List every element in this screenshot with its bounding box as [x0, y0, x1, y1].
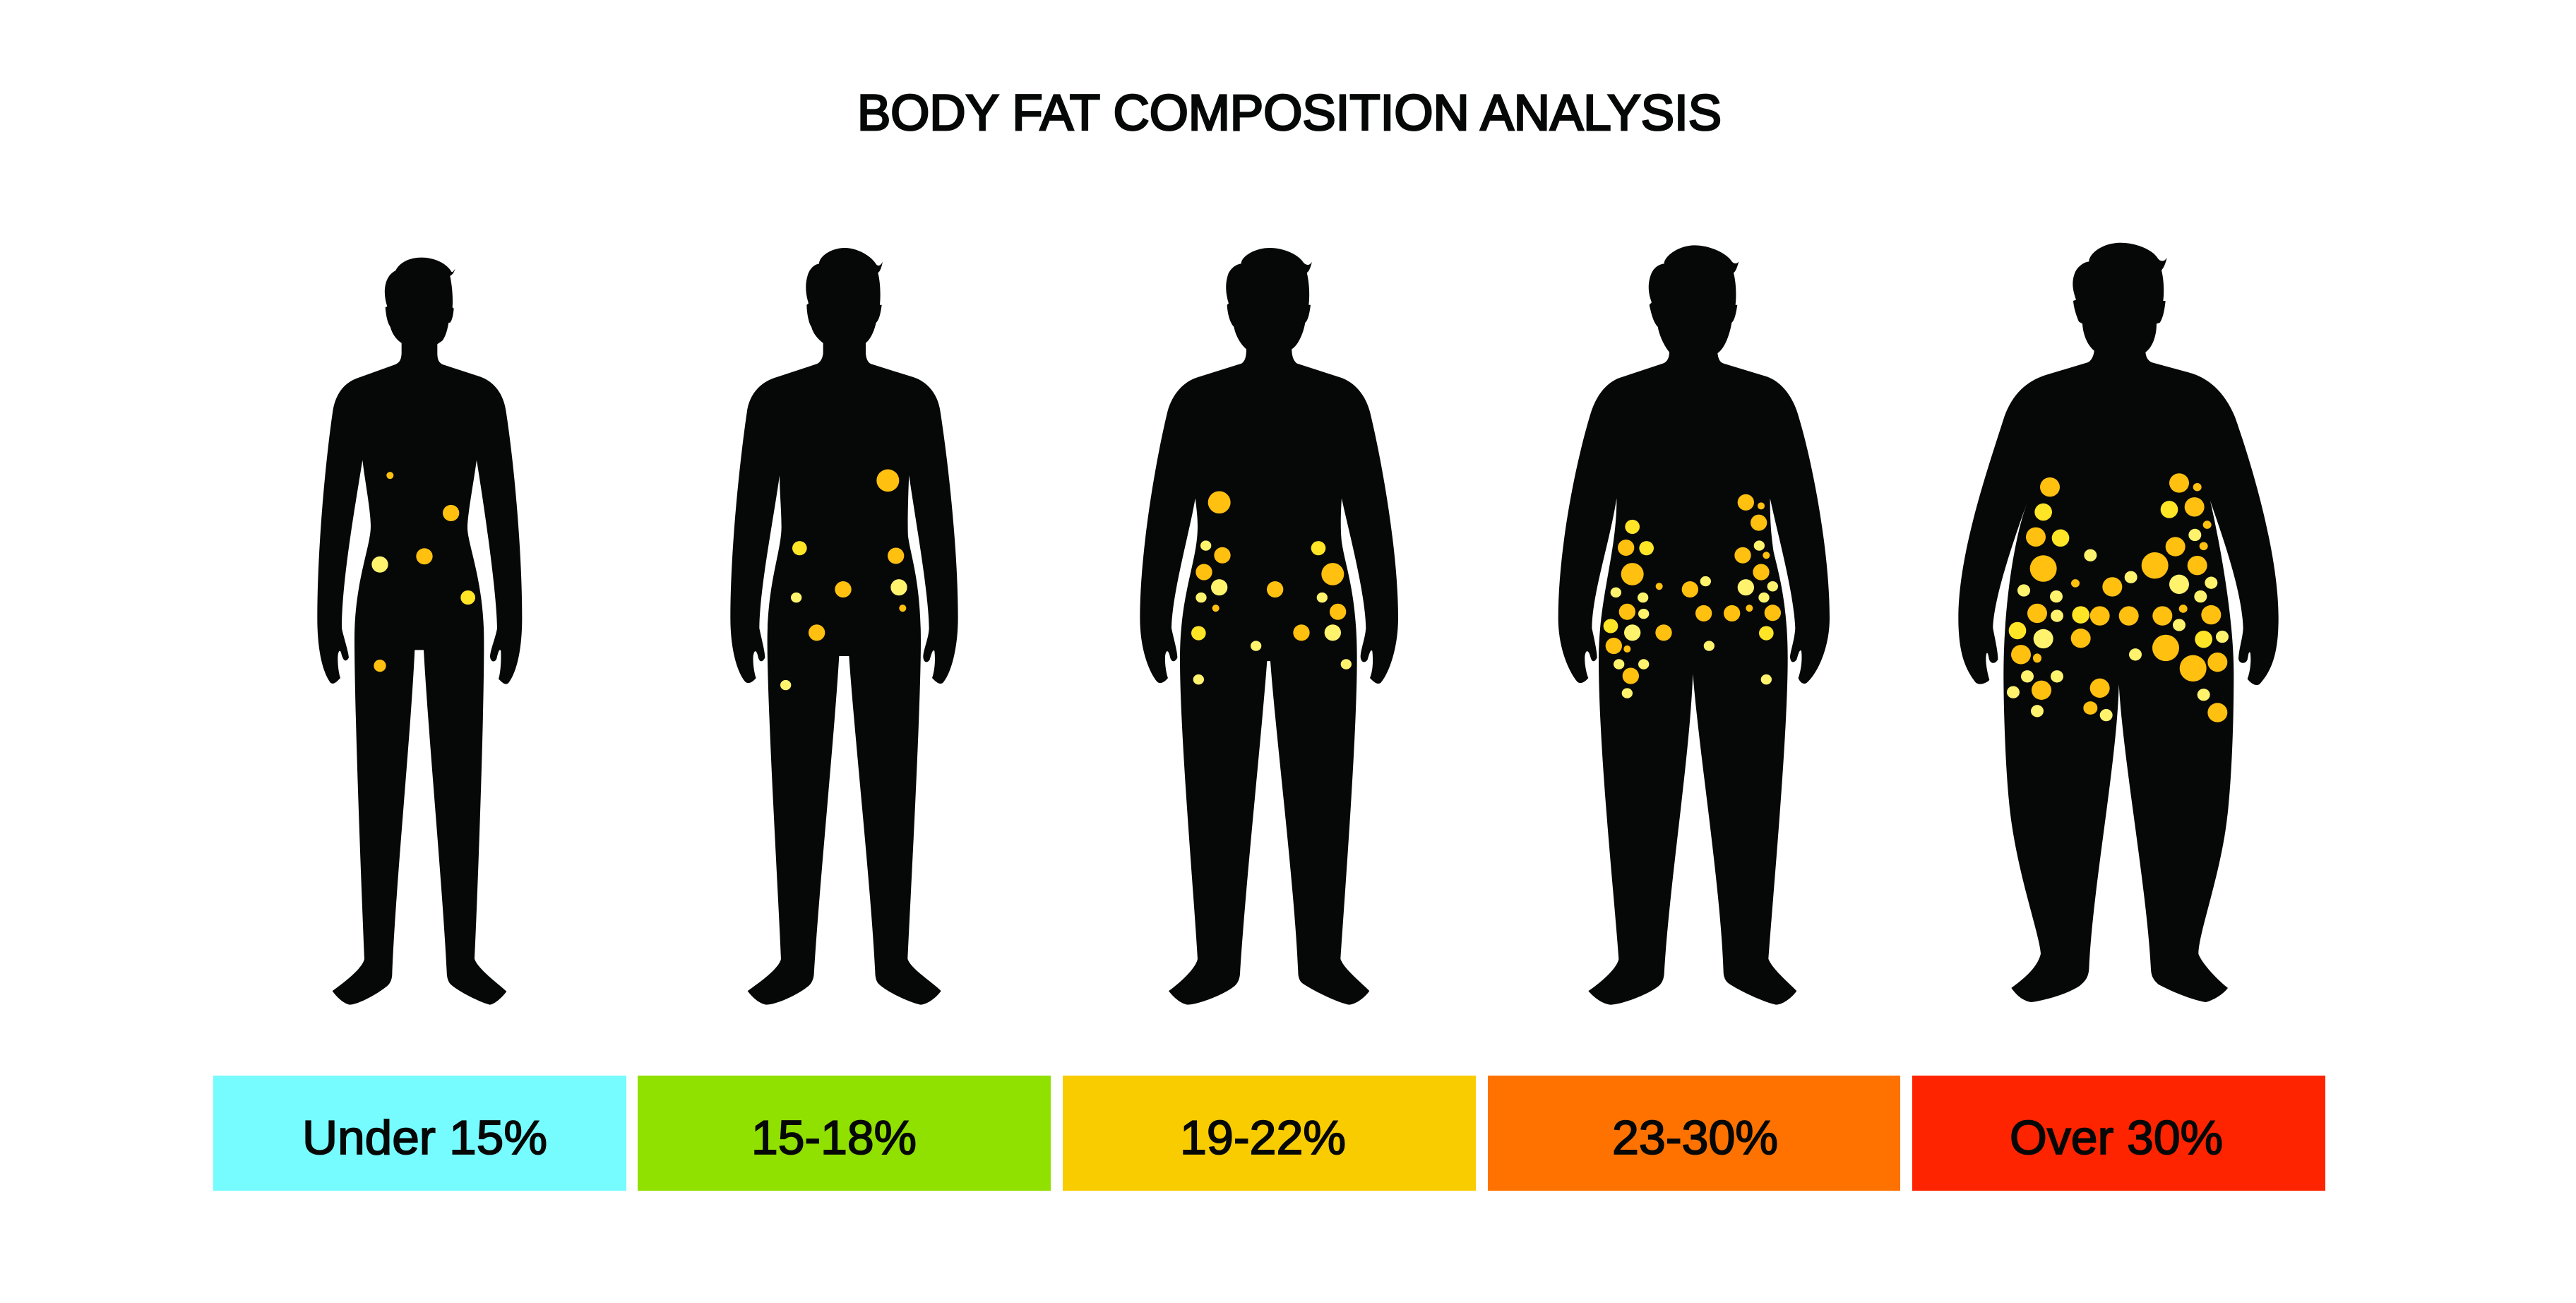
figure: 15-18% body fat — [730, 248, 958, 1005]
figure: 23-30% body fat — [1558, 245, 1830, 1005]
fat cells 4 — [1604, 494, 1781, 698]
fat cells 1 — [371, 472, 475, 672]
fat cells 5 — [2007, 473, 2229, 722]
figure: over 30% body fat — [1958, 243, 2279, 1002]
legend band: under 15%: Under 15% — [302, 1111, 547, 1165]
legend band: over 30% — [1912, 1076, 2325, 1191]
legend band: under 15% — [213, 1076, 626, 1191]
fat cells 2 — [780, 469, 907, 690]
silhouette 1 — [317, 258, 522, 1005]
legend band: 19-22% — [1063, 1076, 1476, 1191]
silhouette 4 — [1558, 245, 1830, 1005]
legend band: 23-30%: 23-30% — [1612, 1111, 1778, 1165]
figure: 19-22% body fat — [1140, 248, 1398, 1005]
legend band: 15-18% — [638, 1076, 1051, 1191]
title: BODY FAT COMPOSITION ANALYSIS — [857, 85, 1722, 141]
legend band: 15-18%: 15-18% — [751, 1111, 917, 1165]
legend band: over 30%: Over 30% — [2010, 1111, 2223, 1165]
silhouette 2 — [730, 248, 958, 1005]
silhouette 3 — [1140, 248, 1398, 1005]
figure: under 15% body fat — [317, 258, 522, 1005]
fat cells 3 — [1191, 491, 1352, 684]
legend band: 23-30% — [1488, 1076, 1900, 1191]
legend band: 19-22%: 19-22% — [1180, 1111, 1346, 1165]
silhouette 5 — [1958, 243, 2279, 1002]
